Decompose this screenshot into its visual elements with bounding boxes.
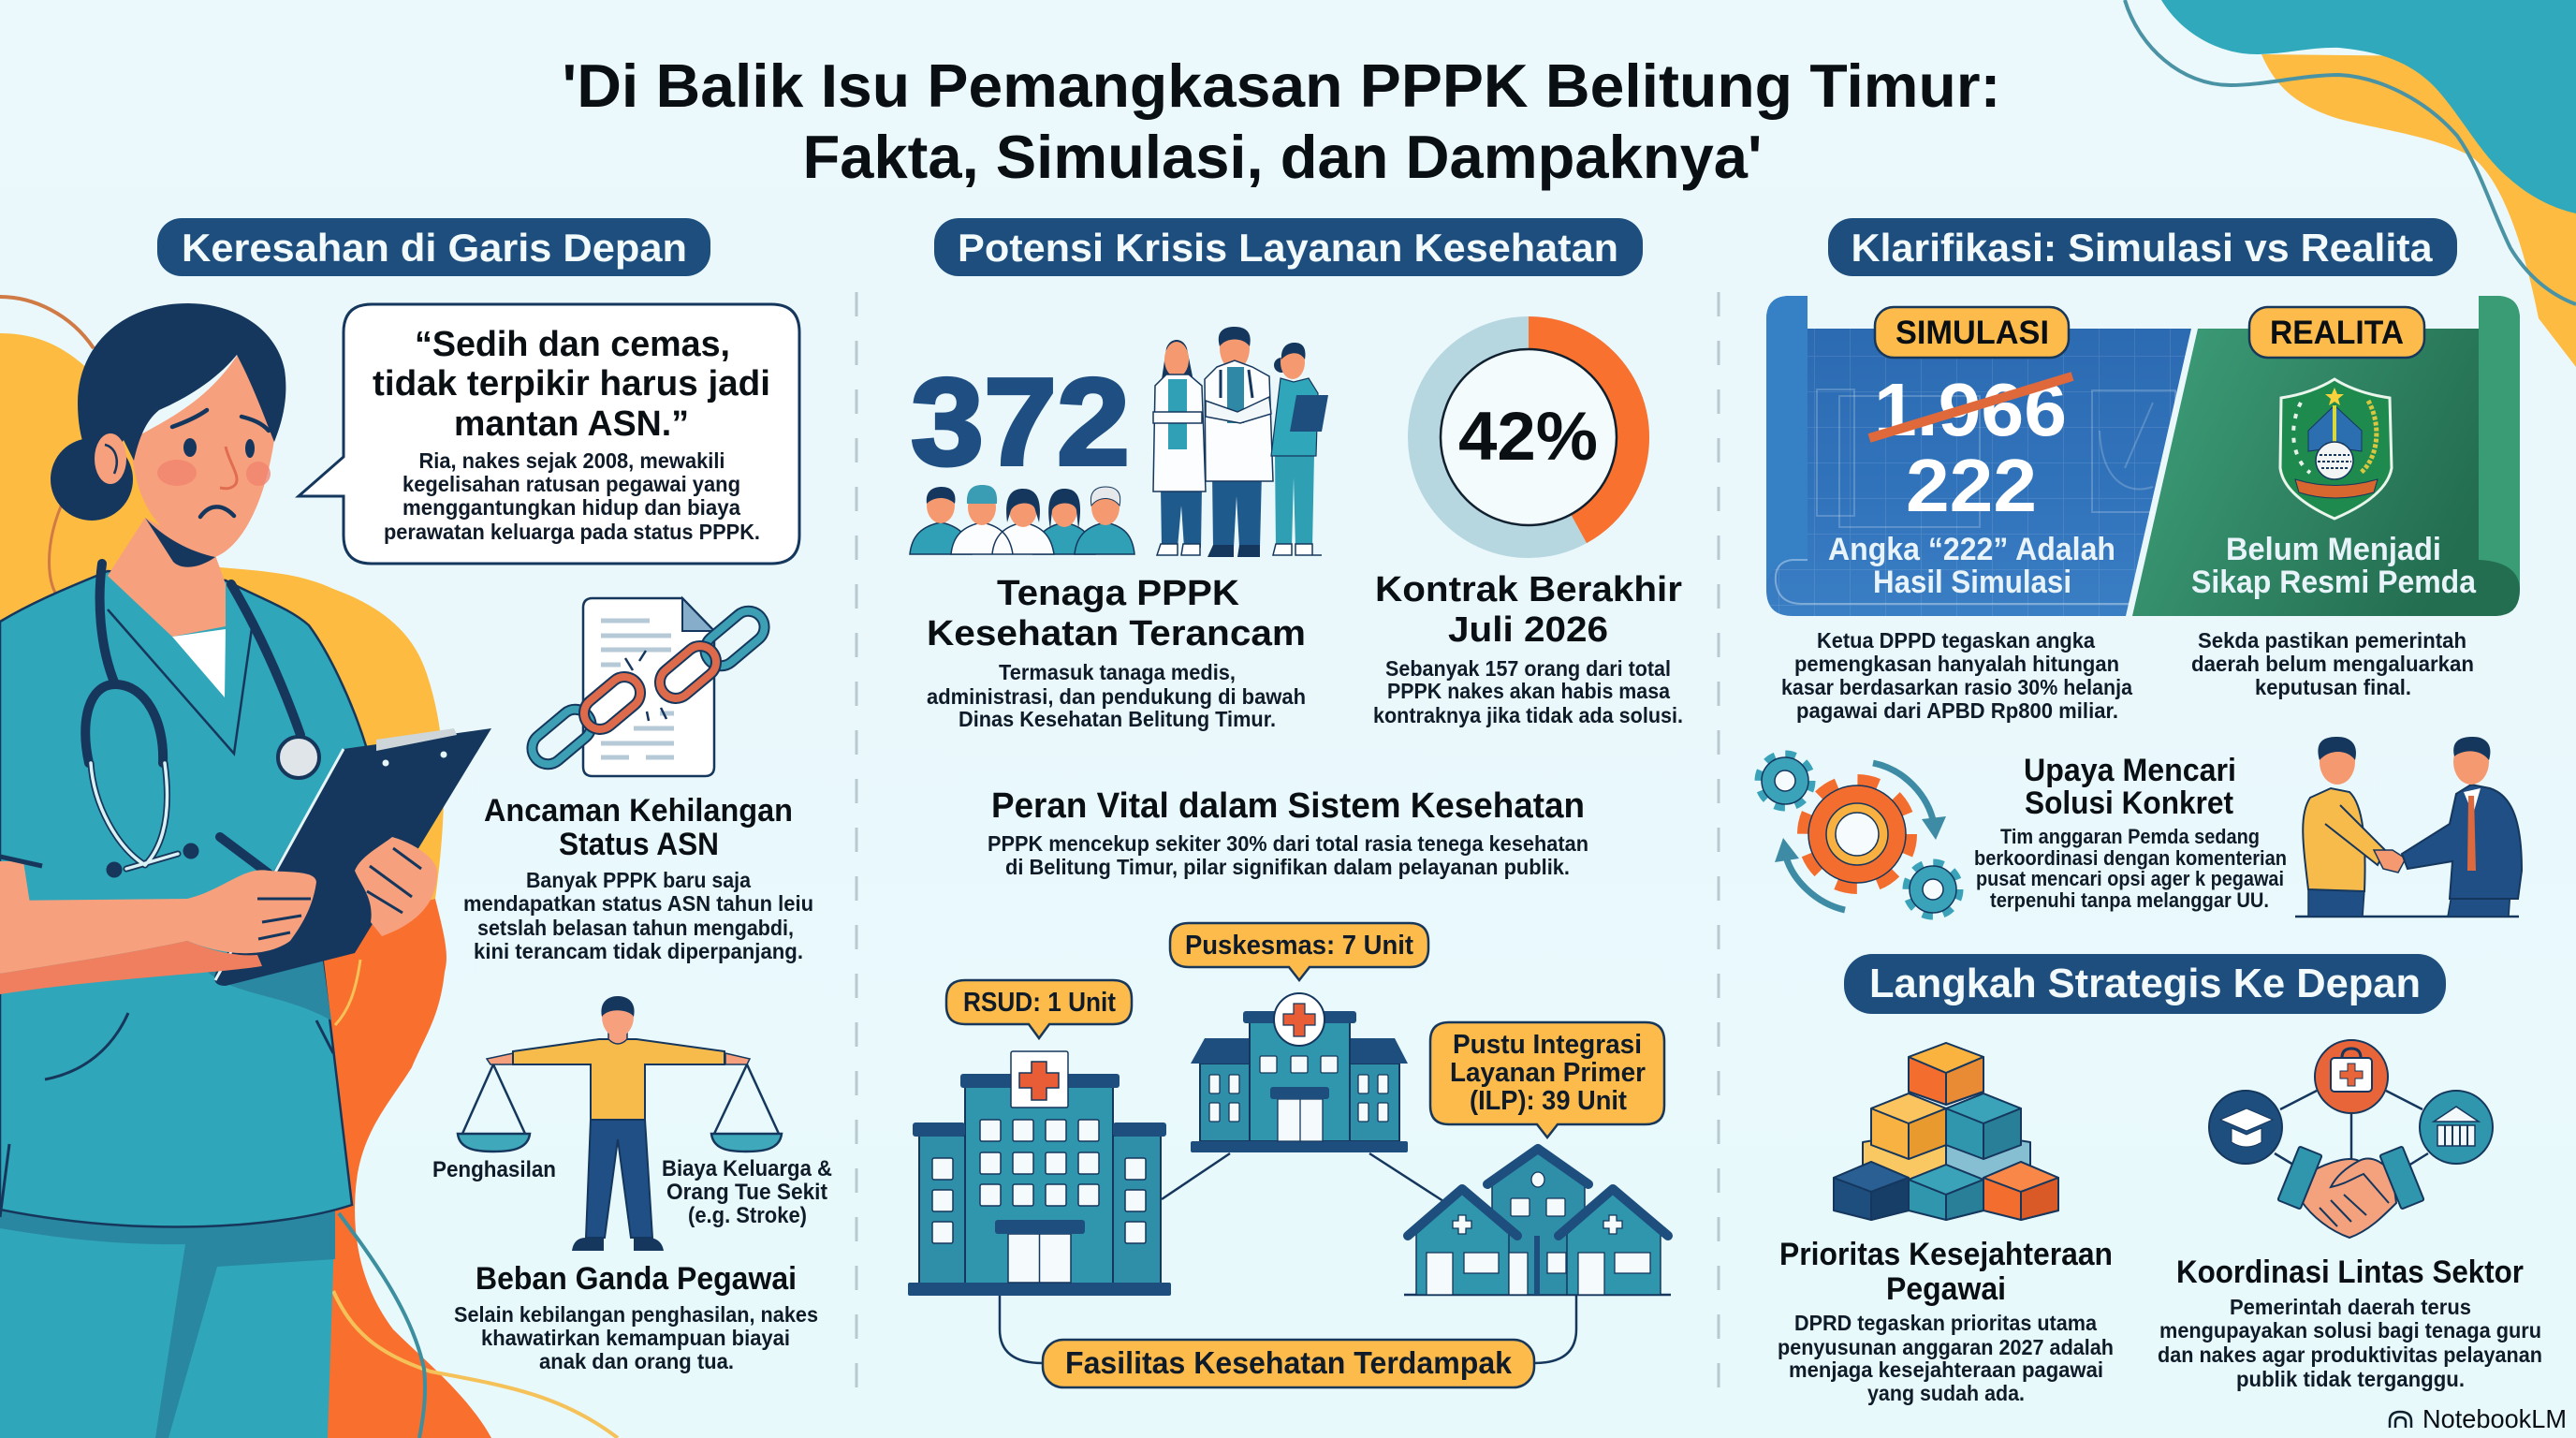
speech bubble quote: Ria, nakes sejak 2008, mewakili (419, 448, 724, 473)
label: Penghasilan: Penghasilan (432, 1157, 556, 1182)
heading pill: Potensi Krisis Layanan Kesehatan: Potensi Krisis Layanan Kesehatan (958, 226, 1618, 270)
text block: Upaya Mencari Solusi Konkret: Upaya Mencari (2024, 753, 2236, 788)
text block: Tenaga PPPK Kesehatan Terancam: Termasuk tanaga medis, (999, 660, 1236, 684)
text block: Ancaman Kehilangan Status ASN: mendapatkan status ASN tahun leiu (463, 891, 813, 916)
text block: simulasi explanation: pemengkasan hanyalah hitungan (1794, 652, 2119, 676)
callout: RSUD 1 Unit: RSUD: 1 Unit (963, 988, 1116, 1018)
nurse illustration (0, 303, 491, 1438)
text block: Koordinasi Lintas Sektor: Pemerintah daerah terus (2230, 1295, 2471, 1319)
text block: Koordinasi Lintas Sektor: publik tidak terganggu. (2236, 1367, 2465, 1391)
text block: Kontrak Berakhir Juli 2026: PPPK nakes akan habis masa (1387, 679, 1670, 703)
icon: man balancing scales (458, 996, 782, 1251)
heading pill: Keresahan di Garis Depan: Keresahan di Garis Depan (182, 226, 687, 270)
realita pill: REALITA (2270, 315, 2404, 351)
heading pill: Langkah Strategis Ke Depan: Langkah Strategis Ke Depan (1869, 961, 2421, 1006)
text block: Peran Vital: di Belitung Timur, pilar signifikan dalam pelayanan publik. (1005, 855, 1570, 879)
speech bubble quote: “Sedih dan cemas, (415, 325, 730, 364)
text block: Peran Vital: PPPK mencekup sekiter 30% dari total rasia tenega kesehatan (988, 831, 1588, 856)
simulasi caption: Angka “222” Adalah (1828, 532, 2115, 567)
connector lines between facilities (1000, 1153, 1576, 1363)
title: 'Di Balik Isu Pemangkasan PPPK Belitung Timur: (562, 51, 2001, 120)
nurse hand on clipboard (355, 837, 437, 936)
icon: regional emblem (2280, 379, 2392, 519)
decoration: left blobs behind nurse (0, 297, 618, 1438)
text block: simulasi explanation: kasar berdasarkan rasio 30% helanja (1781, 675, 2132, 699)
speech bubble quote: tidak terpikir harus jadi (373, 364, 770, 404)
donut chart 42% (1425, 333, 1632, 541)
NotebookLM logo: NotebookLM (2422, 1404, 2567, 1433)
text block: Beban Ganda Pegawai: Selain kebilangan penghasilan, nakes (454, 1302, 818, 1327)
text block: Tenaga PPPK Kesehatan Terancam: Dinas Kesehatan Belitung Timur. (959, 707, 1276, 731)
icon: three medical staff (1153, 327, 1328, 557)
text block: Beban Ganda Pegawai: khawatirkan kemampuan biayai (481, 1326, 790, 1350)
speech bubble quote (299, 304, 799, 564)
text block: Koordinasi Lintas Sektor (2158, 1255, 2542, 1391)
text block: Tenaga PPPK Kesehatan Terancam: administrasi, dan pendukung di bawah (927, 684, 1306, 709)
text block: Kontrak Berakhir Juli 2026 (1373, 570, 1683, 727)
stethoscope (85, 564, 319, 877)
callout: Pustu ILP 39 Unit: Layanan Primer (1450, 1058, 1646, 1088)
text block: Koordinasi Lintas Sektor: dan nakes agar produktivitas pelayanan (2158, 1343, 2542, 1367)
icon: two people shaking hands (2295, 737, 2522, 917)
text block: Upaya Mencari Solusi Konkret: terpenuhi tanpa melanggar UU. (1990, 888, 2269, 912)
label: Biaya Keluarga (662, 1156, 832, 1228)
text block: Beban Ganda Pegawai: Beban Ganda Pegawai (476, 1261, 797, 1297)
label: Biaya Keluarga: Orang Tue Sekit (666, 1180, 827, 1205)
middle flat layer (1863, 1128, 1946, 1181)
icon: cross-sector coordination (2209, 1040, 2493, 1238)
nurse with clipboard (1271, 343, 1328, 555)
text block: realita explanation: Sekda pastikan pemerintah (2198, 628, 2466, 653)
speech bubble quote: perawatan keluarga pada status PPPK. (384, 520, 760, 544)
text block: Prioritas Kesejahteraan Pegawai: yang sudah ada. (1867, 1381, 2025, 1405)
text block: Tenaga PPPK Kesehatan Terancam: Tenaga PPPK (997, 574, 1240, 613)
text block: Prioritas Kesejahteraan Pegawai: Prioritas Kesejahteraan (1779, 1237, 2113, 1272)
realita side (2132, 296, 2520, 616)
text block: Upaya Mencari Solusi Konkret (1974, 753, 2287, 912)
text block: Ancaman Kehilangan Status ASN: setslah belasan tahun mengabdi, (477, 916, 794, 940)
nurse inner shirt (172, 629, 226, 697)
callout: Pustu ILP 39 Unit (1430, 1022, 1664, 1137)
text block: realita explanation (2191, 628, 2474, 699)
text block: simulasi explanation: pagawai dari APBD Rp800 miliar. (1796, 698, 2118, 723)
nurse facial features (157, 410, 271, 517)
text block: realita explanation: daerah belum mengaluarkan (2191, 652, 2474, 676)
text block: Kontrak Berakhir Juli 2026: Kontrak Berakhir (1375, 570, 1682, 609)
text block: simulasi explanation: Ketua DPPD tegaskan angka (1817, 628, 2095, 653)
nurse face (131, 356, 274, 557)
text block: Koordinasi Lintas Sektor: Koordinasi Lintas Sektor (2176, 1255, 2524, 1290)
cube top (1909, 1043, 1983, 1105)
nurse scrub top (0, 571, 367, 1227)
label pill: Fasilitas Kesehatan Terdampak (1043, 1340, 1534, 1387)
number 222: 222 (1906, 444, 2037, 527)
man doctor (1205, 327, 1273, 557)
simulasi caption: Hasil Simulasi (1873, 565, 2071, 600)
text block: Prioritas Kesejahteraan Pegawai: menjaga kesejahteraan pagawai (1789, 1357, 2103, 1382)
label: Biaya Keluarga: Biaya Keluarga & (662, 1156, 832, 1181)
text block: Kontrak Berakhir Juli 2026: kontraknya jika tidak ada solusi. (1373, 703, 1683, 727)
text block: Tenaga PPPK Kesehatan Terancam (927, 574, 1306, 731)
speech bubble quote: menggantungkan hidup dan biaya (402, 495, 740, 520)
icon: five health workers (910, 485, 1134, 554)
text block: Upaya Mencari Solusi Konkret: berkoordinasi dengan komenterian (1974, 846, 2287, 870)
nurse arm holding pen (0, 837, 316, 994)
text block: Upaya Mencari Solusi Konkret: Solusi Konkret (2025, 785, 2233, 821)
label: Biaya Keluarga: (e.g. Stroke) (688, 1203, 807, 1228)
nurse hair bun (51, 438, 133, 521)
speech bubble quote: kegelisahan ratusan pegawai yang (402, 472, 740, 496)
icon: RSUD hospital (908, 1051, 1171, 1296)
cube second row left (1871, 1093, 1946, 1159)
nurse hair (78, 303, 285, 567)
realita caption: Belum Menjadi (2226, 532, 2441, 567)
realita caption: Sikap Resmi Pemda (2191, 565, 2477, 600)
text block: Prioritas Kesejahteraan Pegawai: DPRD tegaskan prioritas utama (1794, 1311, 2097, 1335)
text block: Beban Ganda Pegawai (454, 1261, 818, 1373)
cube bottom orange (1983, 1162, 2058, 1220)
text block: Upaya Mencari Solusi Konkret: pusat mencari opsi ager k pegawai (1976, 867, 2284, 890)
woman doctor (1153, 340, 1206, 555)
text block: Kontrak Berakhir Juli 2026: Juli 2026 (1448, 610, 1608, 650)
icon: stacked cubes (1834, 1043, 2058, 1220)
text block: Ancaman Kehilangan Status ASN: Status ASN (559, 827, 719, 862)
text block: Prioritas Kesejahteraan Pegawai (1778, 1237, 2114, 1405)
simulasi pill: SIMULASI (1895, 315, 2049, 351)
decoration: top-right blobs (2125, 0, 2576, 367)
text block: Ancaman Kehilangan Status ASN: Banyak PPPK baru saja (526, 868, 751, 892)
text block: Ancaman Kehilangan Status ASN (463, 793, 813, 963)
cube bottom teal (1909, 1165, 1983, 1220)
nurse trouser shading (0, 1210, 335, 1438)
title (562, 51, 2001, 191)
title: Fakta, Simulasi, dan Dampaknya' (803, 123, 1762, 191)
nurse trousers (0, 1208, 335, 1438)
text block: Kontrak Berakhir Juli 2026: Sebanyak 157 orang dari total (1385, 656, 1671, 681)
text block: Prioritas Kesejahteraan Pegawai: penyusunan anggaran 2027 adalah (1778, 1335, 2114, 1359)
text block: realita explanation: keputusan final. (2255, 675, 2411, 699)
nurse clipboard (214, 728, 491, 986)
icon: Puskesmas building (1191, 993, 1408, 1152)
nurse neck (108, 518, 226, 637)
heading pill: Klarifikasi: Klarifikasi: Simulasi vs Realita (1852, 226, 2433, 270)
icon: Pustu houses (1404, 1149, 1671, 1295)
speech bubble quote: mantan ASN.” (454, 404, 689, 444)
text block: Ancaman Kehilangan Status ASN: Ancaman Kehilangan (484, 793, 793, 829)
nurse scrub shading (204, 955, 331, 1020)
nurse ear (95, 433, 126, 484)
text block: Peran Vital (988, 786, 1588, 879)
realita pill (2249, 307, 2424, 358)
simulasi pill (1875, 307, 2069, 358)
text block: Koordinasi Lintas Sektor: mengupayakan solusi bagi tenaga guru (2159, 1318, 2541, 1343)
heading pill: Keresahan di Garis Depan (157, 218, 710, 276)
crossed-out number 1.966: 1.966 (1874, 368, 2067, 451)
heading pill: Klarifikasi (1828, 218, 2457, 276)
cube bottom navy (1834, 1162, 1909, 1220)
text block: Ancaman Kehilangan Status ASN: kini terancam tidak diperpanjang. (474, 939, 803, 963)
callout: Pustu ILP 39 Unit: (ILP): 39 Unit (1470, 1086, 1627, 1116)
text block: simulasi explanation (1781, 628, 2132, 723)
text block: Beban Ganda Pegawai: anak dan orang tua. (539, 1349, 734, 1373)
callout: RSUD 1 Unit (946, 980, 1132, 1038)
donut chart 42%: 42% (1458, 399, 1598, 475)
callout: Pustu ILP 39 Unit: Pustu Integrasi (1453, 1030, 1642, 1060)
big number 372: 372 (911, 353, 1130, 491)
text block: Upaya Mencari Solusi Konkret: Tim anggaran Pemda sedang (2000, 825, 2260, 848)
callout: Puskesmas 7 Unit: Puskesmas: 7 Unit (1185, 931, 1413, 961)
cube second row right (1946, 1093, 2021, 1159)
label pill: Fasilitas Kesehatan Terdampak: Fasilitas Kesehatan Terdampak (1065, 1345, 1513, 1380)
text block: Prioritas Kesejahteraan Pegawai: Pegawai (1886, 1271, 2006, 1307)
callout: Puskesmas 7 Unit (1170, 923, 1428, 980)
icon: document with broken chain (525, 598, 771, 776)
heading pill: Potensi Krisis Layanan Kesehatan (934, 218, 1643, 276)
realita caption (2191, 532, 2477, 600)
text block: Tenaga PPPK Kesehatan Terancam: Kesehatan Terancam (927, 614, 1306, 653)
text block: Peran Vital: Peran Vital dalam Sistem Kesehatan (991, 786, 1585, 826)
icon: gears with arrows (1759, 755, 1959, 916)
simulasi side (1766, 296, 2191, 616)
simulasi caption (1828, 532, 2115, 600)
panel: simulasi vs realita (1766, 296, 2520, 616)
